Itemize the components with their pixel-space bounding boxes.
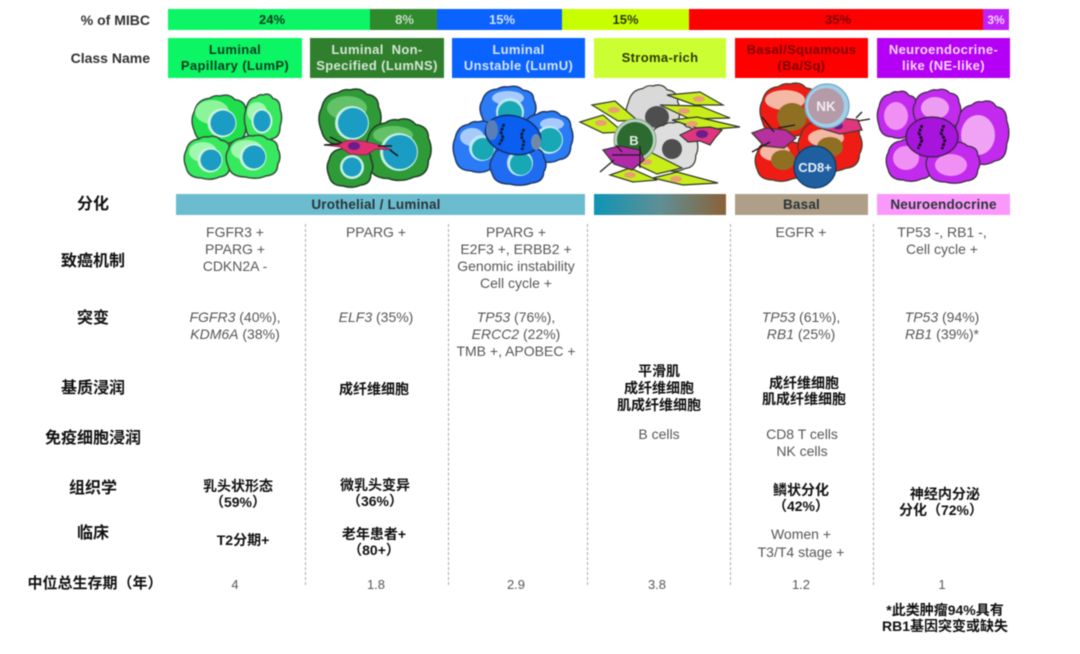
clinical: Ba/Sq: Women +: [771, 526, 831, 542]
mechanism: LumU: Genomic instability: [457, 258, 575, 274]
row label: oncogenic mechanism: 致癌机制: [61, 253, 125, 270]
histology: NE-like: 分化（72%）: [899, 502, 983, 518]
stroma: Stroma-rich: [616, 363, 702, 413]
histology: LumNS: （36%）: [347, 493, 403, 509]
survival: LumP: 4: [231, 577, 239, 592]
clinical: LumNS: （80+）: [348, 542, 400, 558]
mechanism: LumU: [457, 224, 576, 292]
mechanism: LumP: PPARG +: [205, 241, 265, 257]
survival: Stroma-rich: 3.8: [648, 577, 666, 592]
class box: LumNS: Specified (LumNS): [316, 58, 438, 73]
icon: Neuroendocrine-like cells: [877, 89, 1009, 183]
differentiation bar: Neuroendocrine: [877, 194, 1010, 215]
segment Stroma-rich 15%: 15%: [612, 12, 639, 27]
mechanism: LumP: CDKN2A -: [203, 258, 267, 274]
survival: LumU: 2.9: [507, 577, 525, 592]
row label: % of MIBC: % of MIBC: [81, 12, 150, 28]
mechanism: LumU: Cell cycle +: [480, 275, 552, 291]
class box: Stroma-rich: [594, 38, 726, 78]
segment LumNS 8%: 8%: [395, 12, 414, 27]
mutations: LumNS: ELF3 (35%): [339, 309, 413, 325]
mutations: NE-like: [904, 309, 980, 343]
differentiation bar: stroma gradient: [594, 194, 726, 215]
immune: Ba/Sq: [766, 426, 838, 459]
class box: Ba/Sq: (Ba/Sq): [778, 58, 825, 73]
differentiation bar: Urothelial / Luminal: [176, 194, 585, 215]
row label: differentiation: 分化: [77, 196, 109, 213]
mutations: LumU: ERCC2 (22%): [472, 326, 560, 342]
histology: LumP: [202, 478, 274, 510]
class box: LumU: Unstable (LumU): [464, 58, 573, 73]
mechanism: NE-like: Cell cycle +: [906, 241, 978, 257]
clinical: LumNS: 老年患者+: [342, 526, 406, 542]
row label: clinical: 临床: [77, 525, 109, 542]
class box: LumU: [452, 38, 585, 78]
mutations: LumU: TP53 (76%),: [477, 309, 555, 325]
footnote: [882, 602, 1008, 634]
stroma: Stroma-rich: 成纤维细胞: [624, 380, 694, 396]
segment Ba/Sq 35%: 35%: [825, 12, 851, 27]
histology: LumNS: 微乳头变异: [340, 477, 410, 493]
survival: Ba/Sq: 1.2: [792, 577, 810, 592]
class box: LumNS: [310, 38, 444, 78]
icon: Basal/Squamous cells with NK and CD8: [752, 83, 870, 188]
clinical: Ba/Sq: T3/T4 stage +: [758, 544, 844, 560]
histology: Ba/Sq: [772, 482, 830, 514]
mutations: LumU: [456, 309, 576, 359]
class box: LumP: Papillary (LumP): [181, 58, 289, 73]
class box: LumNS: Luminal Non-: [331, 42, 423, 57]
row label: median overall survival: 中位总生存期（年）: [27, 575, 162, 592]
class box: NE-like: like (NE-like): [902, 58, 985, 73]
stroma: Ba/Sq: 肌成纤维细胞: [762, 391, 846, 407]
class box: NE-like: Neuroendocrine-: [889, 42, 998, 57]
class box: LumP: [168, 38, 302, 78]
survival: NE-like: 1: [938, 577, 946, 592]
icon: LumU cells with mitotic cell: [453, 86, 573, 185]
differentiation bar: Basal: Basal: [783, 197, 820, 212]
row label: histology: 组织学: [69, 480, 117, 497]
class box: Ba/Sq: Basal/Squamous: [747, 42, 856, 57]
clinical: LumP: T2分期+: [217, 532, 269, 548]
mutations: Ba/Sq: [762, 309, 840, 343]
stroma: Stroma-rich: 肌成纤维细胞: [617, 397, 701, 413]
class box: LumP: Luminal: [209, 42, 261, 57]
segment LumP 24%: [168, 9, 370, 30]
footnote: RB1基因突变或缺失: [882, 618, 1008, 634]
segment LumP 24%: 24%: [259, 12, 285, 27]
segment NE-like 3%: [983, 9, 1009, 30]
histology: Ba/Sq: （42%）: [773, 498, 829, 514]
mutations: LumP: [189, 309, 280, 343]
segment Ba/Sq 35%: [689, 9, 983, 30]
segment Stroma-rich 15%: [562, 9, 689, 30]
row label: immune infiltrate: 免疫细胞浸润: [45, 430, 141, 447]
mutations: Ba/Sq: RB1 (25%): [767, 326, 835, 342]
histology: LumP: （59%）: [210, 494, 266, 510]
differentiation bar: Urothelial / Luminal: Urothelial / Luminal: [311, 197, 441, 212]
mechanism: Ba/Sq: EGFR +: [776, 224, 826, 240]
segment LumU 15%: [437, 9, 562, 30]
mechanism: LumU: PPARG +: [486, 224, 546, 240]
stacked bar: % of MIBC: [167, 8, 1010, 31]
histology: LumP: 乳头状形态: [203, 478, 273, 494]
histology: NE-like: [899, 486, 983, 518]
row label: mutations: 突变: [77, 310, 109, 327]
mechanism: LumU: E2F3 +, ERBB2 +: [460, 241, 572, 257]
mutations: Ba/Sq: TP53 (61%),: [762, 309, 840, 325]
mutations: LumP: KDM6A (38%): [190, 326, 280, 342]
stroma: Stroma-rich: 平滑肌: [638, 363, 680, 379]
segment LumU 15%: 15%: [489, 12, 515, 27]
mechanism: LumP: [202, 224, 268, 274]
histology: LumNS: [340, 476, 410, 509]
differentiation bar: Neuroendocrine: Neuroendocrine: [890, 197, 997, 212]
mutations: NE-like: TP53 (94%): [905, 309, 979, 325]
mutations: LumP: FGFR3 (40%),: [189, 309, 280, 325]
row label: Class Name: Class Name: [71, 50, 150, 66]
histology: Ba/Sq: 鳞状分化: [773, 482, 829, 498]
stroma: LumNS: 成纤维细胞: [339, 381, 409, 397]
mechanism: NE-like: TP53 -, RB1 -,: [897, 224, 987, 240]
icon label: B: B: [629, 133, 639, 148]
mechanism: LumP: FGFR3 +: [206, 224, 264, 240]
stroma: Ba/Sq: [762, 375, 846, 407]
class box: Ba/Sq: [735, 38, 868, 78]
stroma: Ba/Sq: 成纤维细胞: [769, 375, 839, 391]
class box: Stroma-rich: Stroma-rich: [622, 50, 698, 65]
icon: fibroblast: [324, 137, 398, 156]
survival: LumNS: 1.8: [367, 577, 385, 592]
immune: Ba/Sq: CD8 T cells: [766, 426, 838, 442]
immune: Stroma-rich: B cells: [638, 426, 680, 442]
segment LumNS 8%: [370, 9, 437, 30]
clinical: Ba/Sq: [757, 526, 844, 561]
icon: Stroma-rich cells: [580, 85, 740, 185]
icon label: NK: NK: [816, 99, 836, 114]
mechanism: LumNS: PPARG +: [346, 224, 406, 240]
immune: Ba/Sq: NK cells: [776, 443, 828, 459]
class box: NE-like: [877, 38, 1010, 78]
class box: LumU: Luminal: [492, 42, 545, 57]
mechanism: NE-like: [897, 224, 987, 258]
differentiation bar: Basal: [735, 194, 868, 215]
footnote: *此类肿瘤94%具有: [886, 602, 1004, 618]
clinical: LumNS: [342, 526, 406, 558]
mutations: LumU: TMB +, APOBEC +: [456, 343, 576, 359]
row label: stromal infiltrate: 基质浸润: [61, 380, 125, 397]
icon: LumP cells: [184, 94, 282, 179]
segment NE-like 3%: 3%: [987, 12, 1005, 26]
histology: NE-like: 神经内分泌: [910, 486, 980, 502]
icon label: CD8+: CD8+: [798, 160, 832, 175]
icon: LumNS cells with fibroblast: [319, 89, 431, 187]
mutations: NE-like: RB1 (39%)*: [905, 326, 979, 342]
